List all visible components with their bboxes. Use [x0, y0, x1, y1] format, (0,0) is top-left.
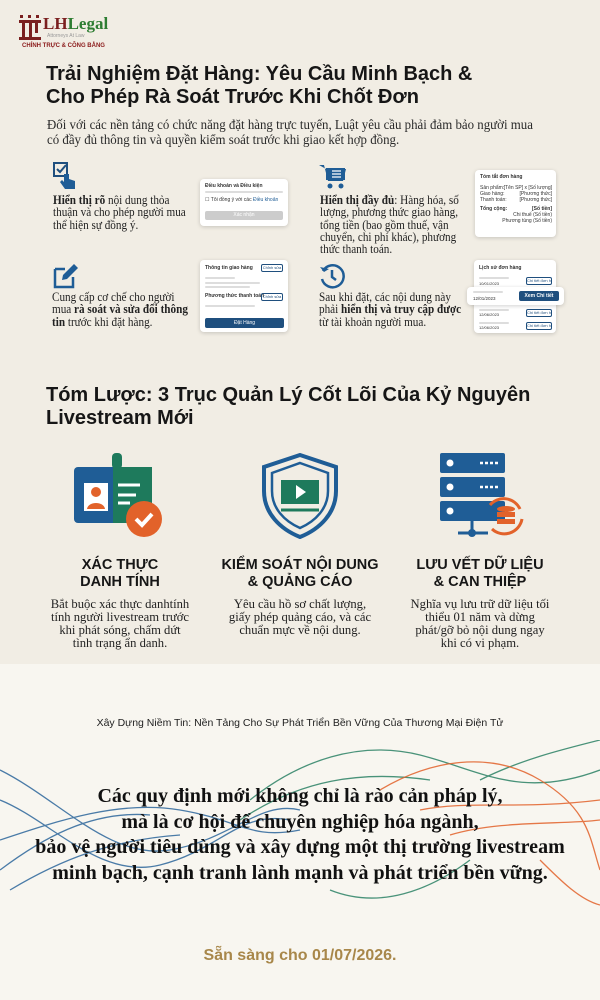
- card: shipping info: [200, 260, 288, 332]
- description: tình trạng ẩn danh.: [73, 635, 167, 650]
- card: order summary: Tóm tắt đơn hàng: [480, 174, 522, 180]
- description: [229, 596, 371, 637]
- icon: clock history: [320, 264, 345, 289]
- card: order summary: [Phương thức]: [520, 191, 552, 197]
- description: Yêu cầu hồ sơ chất lượng,: [234, 596, 366, 611]
- description: [410, 596, 550, 650]
- heading: [221, 556, 379, 590]
- item 1: thuận và cho phép người mua: [53, 204, 186, 219]
- card: order history: 10/01/2023: [479, 281, 499, 286]
- title 1: [46, 63, 472, 108]
- icon: server: [440, 453, 524, 537]
- intro paragraph: có đầy đủ thông tin và quyền kiểm soát trước khi giao kết hợp đồng.: [47, 133, 399, 148]
- card: order history: 12/06/2023: [479, 312, 499, 317]
- heading: & CAN THIỆP: [434, 574, 526, 590]
- heading: DANH TÍNH: [80, 574, 160, 590]
- item 1: thể hiện sự đồng ý.: [53, 217, 138, 232]
- date callout: Sẵn sàng cho 01/07/2026.: [204, 947, 396, 964]
- subtitle: Xây Dựng Niềm Tin: Nền Tảng Cho Sự Phát Triển Bền Vững Của Thương Mại Điện Tử: [97, 717, 503, 729]
- item 2: lượng, phương thức giao hàng,: [320, 204, 458, 219]
- item 4: phải hiển thị và truy cập được: [319, 301, 461, 316]
- item 3: mua rà soát và sửa đổi thông: [52, 301, 188, 316]
- card: order summary: Giao hàng:: [480, 191, 504, 197]
- heading: [80, 556, 160, 590]
- card: shipping info: Đặt Hàng: [234, 320, 255, 326]
- callout: view detail popup: [467, 287, 564, 305]
- item 2: chuyển, chi phí khác), phương: [320, 229, 456, 244]
- intro paragraph: Đối với các nền tảng có chức năng đặt hàng trực tuyến, Luật yêu cầu phải đảm bảo người mua: [47, 118, 533, 133]
- description: phát/gỡ bỏ nội dung ngay: [415, 622, 545, 637]
- icon: id card: [74, 453, 162, 537]
- description: Nghĩa vụ lưu trữ dữ liệu tối: [411, 596, 549, 611]
- card: shipping info: Thông tin giao hàng: [205, 265, 253, 271]
- closing quote: [35, 785, 565, 884]
- card: order summary: [Phương thức]: [520, 197, 552, 203]
- card: terms: Xác nhận: [233, 212, 255, 218]
- title 2: [46, 384, 530, 429]
- card: terms: Điều khoản và Điều kiện: [205, 183, 263, 189]
- description: [51, 596, 189, 650]
- logo: [19, 14, 108, 49]
- closing quote: minh bạch, cạnh tranh lành mạnh và phát triển bền vững.: [52, 862, 548, 884]
- description: khi phát sóng, chấm dứt: [59, 622, 181, 637]
- card: order history: [474, 260, 556, 333]
- item 2: [319, 165, 459, 256]
- title 1: Trải Nghiệm Đặt Hàng: Yêu Cầu Minh Bạch &: [46, 63, 472, 85]
- icon: shield video: [262, 453, 338, 539]
- item 4: Sau khi đặt, các nội dung này: [319, 289, 451, 304]
- title 2: Livestream Mới: [46, 407, 194, 429]
- item 4: [319, 264, 461, 329]
- logo: CHÍNH TRỰC & CÔNG BẰNG: [22, 43, 105, 49]
- description: Bắt buộc xác thực danhtính: [51, 596, 189, 611]
- card: order summary: [Số tiền]: [532, 206, 552, 212]
- item 3: Cung cấp cơ chế cho người: [52, 289, 175, 304]
- callout: view detail popup: Xem Chi tiết: [525, 293, 553, 299]
- heading: & QUẢNG CÁO: [248, 574, 352, 590]
- card: terms: [200, 179, 288, 226]
- card: order summary: Phương tùng (Số tiền): [502, 218, 552, 224]
- icon: edit: [54, 264, 78, 288]
- heading: XÁC THỰC: [82, 557, 158, 573]
- logo: LHLegal: [43, 14, 108, 33]
- card: order summary: Thanh toán:: [480, 197, 507, 203]
- item 2: tổng tiền (bao gồm thuế, vận: [320, 217, 449, 232]
- title 1: Cho Phép Rà Soát Trước Khi Chốt Đơn: [46, 86, 419, 108]
- item 1: Hiển thị rõ nội dung thỏa: [53, 192, 169, 207]
- panel: data retention: [410, 453, 550, 650]
- card: shipping info: Phương thức thanh toán: [205, 293, 264, 299]
- closing quote: mà là cơ hội để chuyên nghiệp hóa ngành,: [121, 810, 479, 832]
- intro paragraph: [47, 118, 533, 148]
- card: order history: 12/06/2023: [479, 325, 499, 330]
- card: order summary: Sản phẩm:: [480, 185, 504, 191]
- heading: [416, 556, 544, 590]
- item 3: [52, 264, 188, 329]
- card: order summary: [Tên SP] x [Số lượng]: [504, 185, 552, 191]
- item 1: [53, 162, 186, 232]
- icon: checkbox hand: [53, 162, 75, 189]
- item 2: thức thanh toán.: [320, 241, 392, 256]
- description: giấy phép quảng cáo, và các: [229, 609, 371, 624]
- panel: identity: [51, 453, 189, 650]
- panel: content control: [221, 453, 379, 637]
- item 4: từ tài khoản người mua.: [319, 314, 426, 329]
- closing quote: bảo vệ người tiêu dùng và xây dựng một thị trường livestream: [35, 836, 565, 858]
- bottom section background: [0, 664, 600, 1000]
- logo: Attorneys At Law: [47, 33, 85, 39]
- heading: KIỂM SOÁT NỘI DUNG: [221, 557, 379, 573]
- decorative waves: [0, 740, 600, 906]
- description: chuẩn mực về nội dung.: [239, 622, 361, 637]
- title 2: Tóm Lược: 3 Trục Quản Lý Cốt Lõi Của Kỷ Nguyên: [46, 384, 530, 406]
- description: khi có vi phạm.: [441, 635, 519, 650]
- description: tính người livestream trước: [51, 609, 189, 624]
- card: order history: Lịch sử đơn hàng: [479, 265, 521, 271]
- heading: LƯU VẾT DỮ LIỆU: [416, 557, 544, 573]
- card: terms: ☐ Tôi đồng ý với các Điều khoản: [205, 197, 278, 203]
- closing quote: Các quy định mới không chỉ là rào cản pháp lý,: [97, 785, 503, 807]
- callout: view detail popup: 12/01/2023: [473, 296, 496, 301]
- card: shipping info: Chỉnh sửa: [263, 294, 281, 299]
- icon: cart: [319, 165, 346, 188]
- description: thiểu 01 năm và dừng: [425, 609, 535, 624]
- icon: logo mark: [19, 15, 41, 40]
- card: shipping info: Chỉnh sửa: [263, 265, 281, 270]
- card: order summary: Tổng cộng:: [480, 206, 507, 212]
- card: order summary: Chi thuế (Số tiền): [513, 212, 552, 218]
- item 3: tin trước khi đặt hàng.: [52, 314, 152, 329]
- card: order summary: [475, 170, 556, 237]
- item 2: Hiển thị đầy đủ: Hàng hóa, số: [320, 192, 459, 207]
